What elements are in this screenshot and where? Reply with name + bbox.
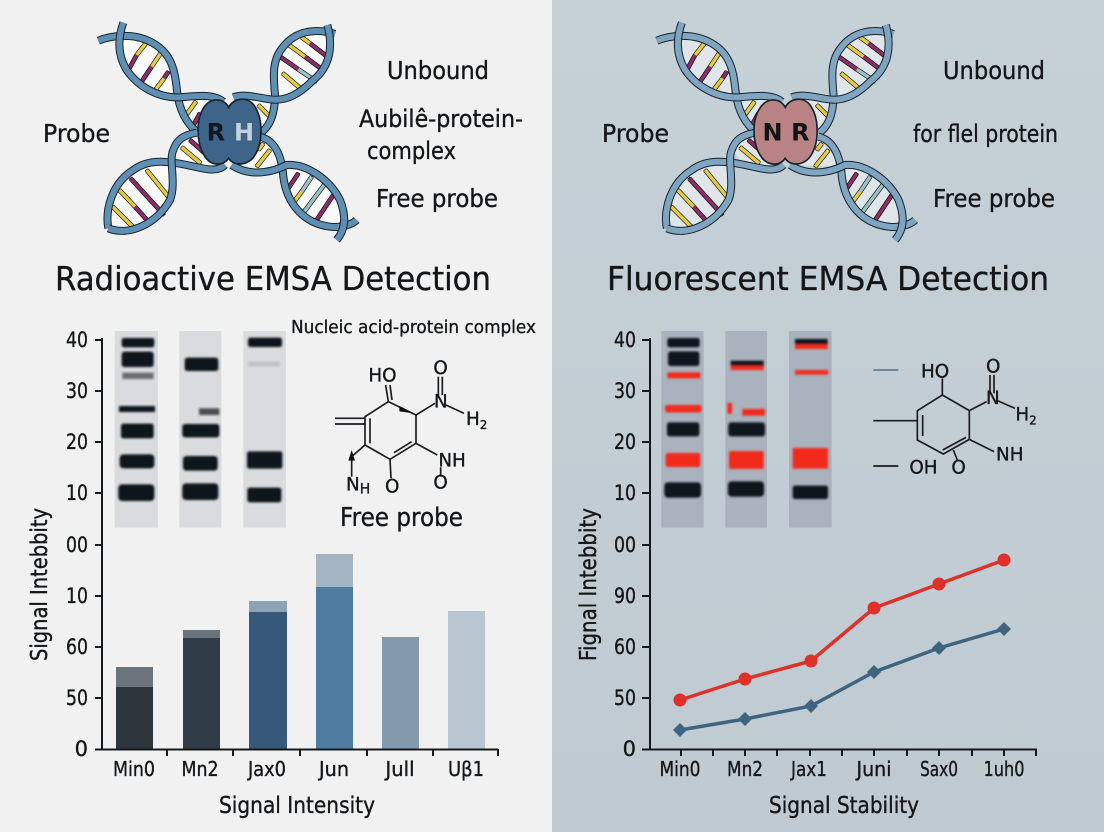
label: protein complex: Aubilê-protein-	[359, 105, 523, 133]
axes	[642, 338, 1037, 756]
chemical structure: radioactive probe: H	[466, 409, 480, 430]
chemical structure: radioactive probe	[335, 358, 487, 497]
y axis labels: 0	[623, 737, 636, 761]
y axis labels: 40	[614, 328, 636, 352]
chemical structure: radioactive probe: 2	[480, 418, 487, 432]
y axis labels	[614, 328, 636, 761]
axes	[95, 338, 498, 756]
y axis labels: 00	[66, 533, 88, 557]
y axis labels: 10	[614, 481, 636, 505]
x axis labels: Jun	[317, 757, 349, 781]
panel: radioactive EMSA detection	[27, 23, 536, 819]
y axis labels: 20	[66, 430, 88, 454]
panel background: fluorescent	[552, 0, 1104, 832]
x axis labels: Uβ1	[448, 757, 484, 781]
y axis labels: 20	[614, 430, 636, 454]
illustration: DNA helices bound to pink protein: R	[791, 119, 810, 147]
label: Free probe: Free probe	[376, 184, 498, 213]
y axis labels: 90	[614, 584, 636, 608]
series: red line with circle markers	[674, 554, 1010, 706]
axis title: Signal Intensity: Signal Intensity	[219, 793, 375, 819]
line chart: signal stability	[576, 328, 1037, 819]
chemical structure: radioactive probe: O	[385, 476, 399, 497]
illustration: DNA helices bound to dark blue protein	[98, 23, 357, 240]
x axis labels: Jax0	[246, 757, 286, 781]
bar chart: signal intensity	[27, 328, 498, 819]
chemical structure: radioactive probe: NH	[438, 451, 466, 472]
gel lanes: fluorescent	[661, 331, 832, 528]
x axis labels: Sax0	[920, 757, 958, 781]
chemical structure: radioactive probe: O	[433, 472, 448, 493]
y axis labels: 50	[614, 686, 636, 710]
chemical structure: fluorescent probe: O	[986, 356, 1000, 377]
gel lanes: radioactive	[115, 331, 286, 528]
label: protein complex: complex	[367, 137, 456, 165]
chemical structure: fluorescent probe: OH	[909, 457, 938, 478]
x axis labels: 1uh0	[984, 757, 1024, 781]
chemical structure: fluorescent probe: 2	[1029, 414, 1037, 428]
heading: Radioactive EMSA Detection: Radioactive EMSA Detection	[55, 259, 491, 298]
label: Free probe: Free probe	[933, 184, 1055, 213]
bars	[116, 554, 485, 749]
y axis title: Signal Intebbity	[27, 508, 53, 661]
chemical structure: radioactive probe: H	[360, 481, 370, 497]
x axis labels: Min0	[660, 757, 700, 781]
label: Probe: Probe	[43, 119, 110, 148]
x axis labels: Jax1	[789, 757, 827, 781]
chemical structure: radioactive probe: N	[434, 391, 448, 412]
y axis labels: 0	[75, 737, 88, 761]
y axis labels: 10	[66, 584, 88, 608]
panel background: radioactive	[0, 0, 552, 832]
chemical structure: fluorescent probe: HO	[921, 361, 949, 382]
heading: Fluorescent EMSA Detection: Fluorescent EMSA Detection	[607, 259, 1049, 298]
x axis labels: Mn2	[727, 757, 763, 781]
label: Probe: Probe	[602, 119, 669, 148]
y axis labels: 00	[614, 533, 636, 557]
x axis labels: Min0	[113, 757, 155, 781]
y axis labels: 40	[66, 328, 88, 352]
y axis labels: 60	[66, 635, 88, 659]
label: Unbound: Unbound	[943, 56, 1045, 85]
x axis labels: Jull	[384, 757, 414, 781]
chemical structure: fluorescent probe	[873, 356, 1037, 478]
x axis labels	[660, 757, 1024, 781]
chemical structure: fluorescent probe: N	[986, 388, 1000, 409]
chemical structure: fluorescent probe: NH	[996, 445, 1023, 466]
x axis labels	[113, 757, 484, 781]
y axis labels: 10	[66, 481, 88, 505]
x axis labels: Juni	[855, 757, 892, 781]
axis title: Signal Stability: Signal Stability	[769, 793, 919, 819]
chemical structure: radioactive probe: N	[346, 475, 360, 496]
illustration: DNA helices bound to dark blue protein: R	[207, 119, 225, 147]
label: protein complex	[359, 105, 523, 165]
illustration: DNA helices bound to pink protein	[657, 23, 915, 240]
y axis title: Fignal Intebbity	[576, 508, 602, 661]
y axis labels	[66, 328, 88, 761]
chemical structure: radioactive probe: HO	[368, 366, 397, 387]
label: Unbound: Unbound	[387, 56, 489, 85]
panel: fluorescent EMSA detection	[576, 23, 1058, 819]
x axis labels: Mn2	[182, 757, 218, 781]
chemical structure: radioactive probe: O	[433, 358, 448, 379]
illustration: DNA helices bound to dark blue protein: H	[234, 119, 254, 147]
chemical structure: fluorescent probe: H	[1015, 405, 1029, 426]
y axis labels: 50	[66, 686, 88, 710]
series: blue line with diamond markers	[673, 622, 1011, 737]
y axis labels: 30	[66, 379, 88, 403]
label: for flel protein: for flel protein	[913, 120, 1058, 148]
y axis labels: 60	[614, 635, 636, 659]
illustration: DNA helices bound to pink protein: N	[762, 119, 783, 147]
label: Nucleic acid-protein complex: Nucleic acid-protein complex	[291, 317, 536, 338]
label: Free probe under structure: Free probe	[340, 503, 463, 533]
chemical structure: fluorescent probe: O	[951, 457, 966, 478]
y axis labels: 30	[614, 379, 636, 403]
